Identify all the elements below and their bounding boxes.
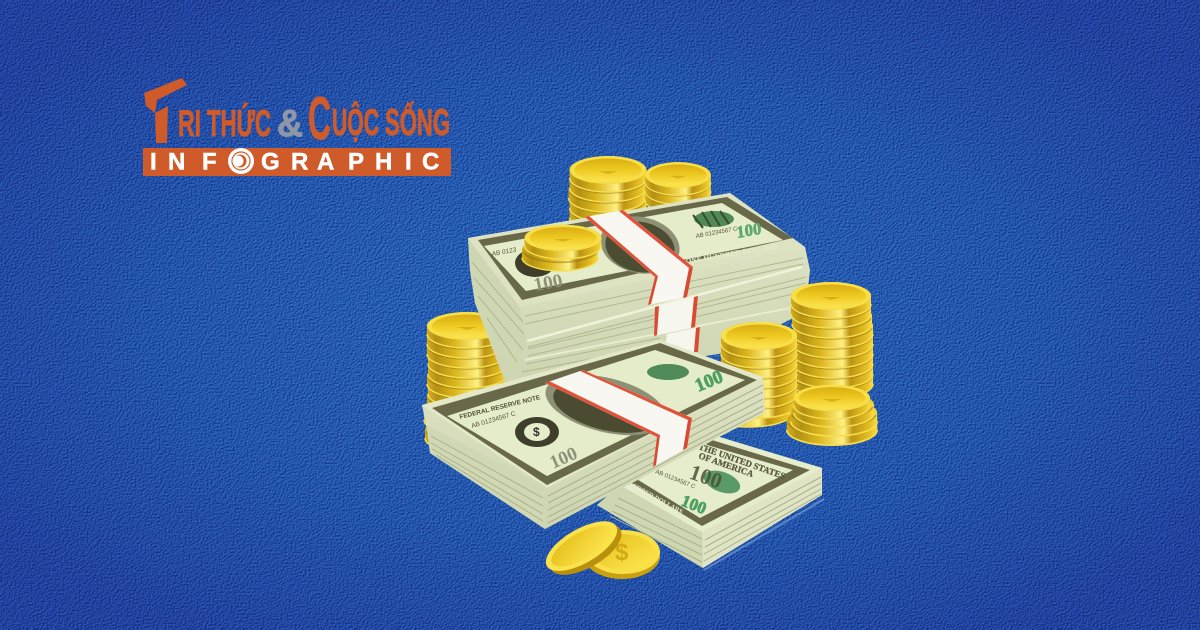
paper band: front stack bbox=[545, 370, 692, 467]
logo disc icon bbox=[228, 148, 254, 174]
coin stack: centre right bbox=[703, 322, 797, 427]
coin stack: tall right bbox=[791, 282, 873, 398]
coin stack: back right bbox=[645, 162, 711, 213]
green portrait bbox=[647, 364, 689, 380]
seal bbox=[515, 417, 559, 447]
bill stack: upper large bbox=[468, 193, 810, 387]
coin flat: $ bbox=[615, 539, 629, 566]
portrait bbox=[686, 459, 743, 498]
bill stack: lower right: NDRED DOLLARS bbox=[631, 483, 684, 516]
bill stack: front: 100 bbox=[692, 366, 726, 397]
bill stack: front: 100 bbox=[547, 443, 581, 474]
note heading: THE UNITED STATES bbox=[697, 441, 787, 481]
illustration: money and coins bbox=[422, 156, 877, 586]
bill stack: upper large: AB 0123 bbox=[491, 246, 517, 258]
left face bbox=[468, 238, 527, 387]
bill stack: lower right bbox=[597, 435, 824, 570]
paper band: upper stack bbox=[585, 210, 700, 352]
logo wordmark: THỨC bbox=[207, 102, 271, 144]
logo wordmark bbox=[178, 85, 450, 152]
coins on upper stack bbox=[522, 225, 601, 271]
portrait oval bbox=[539, 364, 673, 446]
portrait: 100 bbox=[686, 459, 726, 494]
bill stack: lower right: 100 bbox=[679, 491, 709, 518]
bill stack: lower right: AB 01234567 C bbox=[654, 469, 696, 491]
bill stack: upper large: AB 01234567 C bbox=[696, 226, 738, 240]
coin stack: far left bbox=[424, 312, 508, 452]
logo wordmark: UỘC bbox=[332, 101, 379, 143]
green portrait detail bbox=[693, 211, 734, 228]
bill stack: front: AB 01234567 C bbox=[471, 410, 517, 430]
logo: Tri thức & Cuộc sống Infographic: GRAPHIC bbox=[261, 148, 439, 176]
bill text: 100 bbox=[735, 219, 762, 242]
logo: Tri thức & Cuộc sống Infographic: INF bbox=[150, 148, 217, 176]
logo wordmark: & bbox=[277, 103, 303, 145]
portrait oval bbox=[595, 209, 685, 281]
bill stack: front: FEDERAL RESERVE NOTE bbox=[459, 394, 542, 421]
logo infographic bar bbox=[143, 148, 451, 176]
note face bbox=[620, 435, 822, 532]
seal bbox=[515, 249, 555, 277]
logo wordmark: SỐNG bbox=[385, 101, 450, 143]
coin stack: back left bbox=[569, 156, 646, 232]
bill stack: front bbox=[422, 340, 765, 529]
bill stack: upper large: ONE HUNDRED DOLLARS bbox=[685, 241, 778, 266]
seal: $ bbox=[533, 425, 540, 439]
note border strips bbox=[702, 437, 810, 470]
note heading: OF AMERICA bbox=[697, 450, 756, 479]
bill stack: upper large: 100 bbox=[532, 271, 564, 296]
coin stack: short right bbox=[787, 385, 877, 445]
coins: loose front bbox=[538, 510, 660, 586]
logo wordmark: RI bbox=[178, 103, 201, 144]
logo: Tri thức & Cuộc sống Infographic bbox=[143, 78, 451, 176]
logo roof letter T bbox=[144, 78, 187, 143]
logo wordmark: C bbox=[308, 85, 331, 152]
stack silhouette bbox=[468, 193, 810, 387]
coin tilted bbox=[538, 510, 629, 586]
top face bbox=[468, 193, 805, 307]
